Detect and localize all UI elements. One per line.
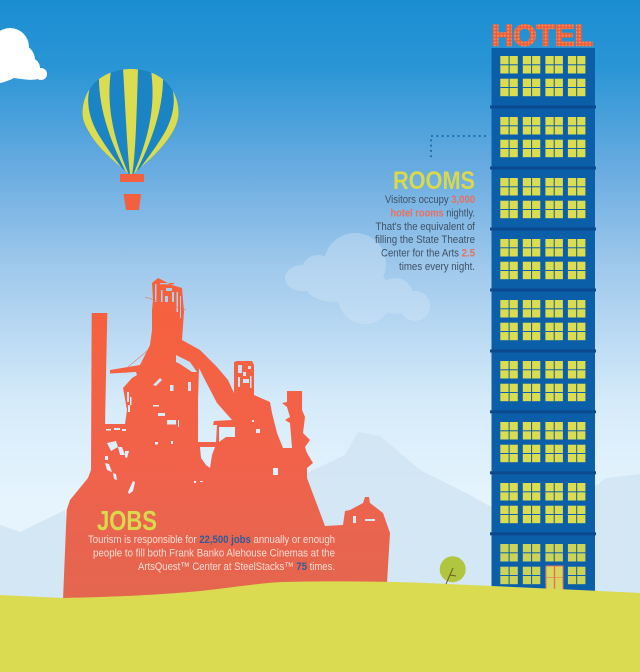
hot air balloon [80, 68, 182, 210]
hotel door [546, 566, 563, 590]
pale cloud [285, 233, 430, 324]
rooms text: times every night. [399, 261, 475, 273]
jobs text: people to fill both Frank Banko Alehouse Cinemas at the [93, 548, 335, 560]
rooms text: Visitors occupy 3,000 [385, 194, 475, 206]
rooms heading: ROOMS [393, 167, 475, 195]
rooms text: Center for the Arts 2.5 [381, 248, 475, 260]
floor separators [490, 106, 596, 535]
rooms text: filling the State Theatre [375, 234, 475, 246]
jobs text [88, 534, 335, 573]
tree [440, 556, 466, 584]
background mountains [0, 432, 640, 600]
hotel building [490, 48, 596, 598]
hotel marquee sign: HOTEL [492, 20, 593, 52]
rooms text [375, 194, 476, 273]
rooms text: hotel rooms nightly. [390, 208, 475, 220]
steel stacks silhouette [63, 278, 390, 600]
rooms text: That's the equivalent of [376, 221, 476, 233]
dotted connector [431, 136, 485, 161]
windows [500, 56, 585, 584]
jobs text: ArtsQuest™ Center at SteelStacks™ 75 times. [138, 561, 335, 573]
jobs text: Tourism is responsible for 22,500 jobs annually or enough [88, 534, 335, 546]
white cloud top left [0, 28, 47, 83]
jobs heading: JOBS [97, 505, 157, 536]
grassy ground [0, 581, 640, 672]
